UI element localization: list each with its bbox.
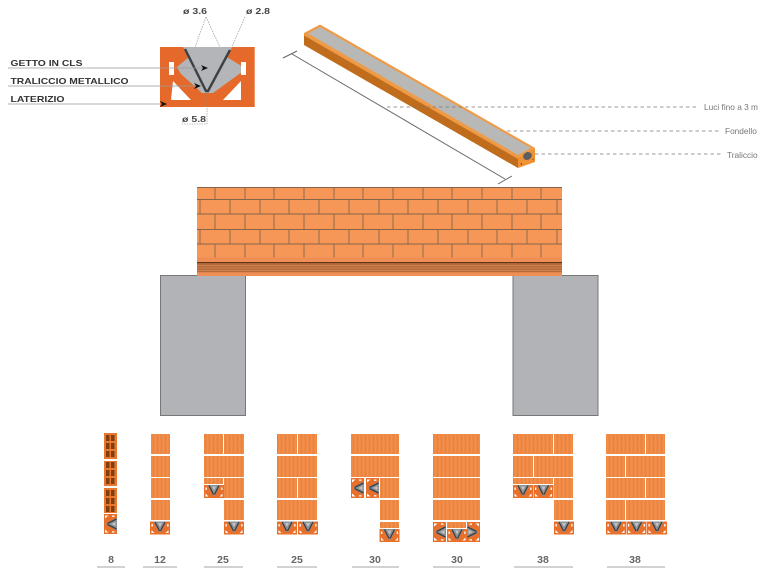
section holes <box>169 62 246 100</box>
label: getto in cls: GETTO IN CLS <box>10 58 83 68</box>
callout: fondello: Fondello <box>725 126 757 136</box>
beam top face <box>304 24 535 157</box>
diameter 2.8 label: ø 2.8 <box>246 6 270 16</box>
wall bricks <box>197 187 562 258</box>
bricks <box>513 434 573 520</box>
section body: laterizio <box>160 47 255 107</box>
configuration 25 B <box>277 434 318 567</box>
width 30: 30 <box>451 554 463 566</box>
section detail of the lintel <box>8 6 270 124</box>
configuration 38 B <box>606 434 667 567</box>
configuration 30 A <box>351 434 400 567</box>
callout: luci fino a 3 m: Luci fino a 3 m <box>704 102 758 112</box>
beam end face <box>518 148 535 168</box>
3D beam <box>283 24 758 184</box>
bricks <box>277 434 317 520</box>
label: traliccio metallico: TRALICCIO METALLICO <box>10 76 129 86</box>
diameter 3.6 label: ø 3.6 <box>183 6 207 16</box>
configuration 25 A <box>204 434 244 567</box>
bricks <box>433 434 480 528</box>
configuration 30 B <box>433 434 480 567</box>
beam side face <box>304 33 518 168</box>
callout: traliccio: Traliccio <box>727 150 758 160</box>
leader line: luci <box>387 107 722 154</box>
bricks <box>606 434 665 520</box>
beam length dimension <box>283 51 512 184</box>
hollow bricks <box>104 433 117 459</box>
left pillar <box>160 276 246 416</box>
section concrete fill <box>177 47 243 93</box>
width 25: 25 <box>217 554 229 566</box>
configuration 12 <box>143 434 177 567</box>
lintel bands <box>197 258 562 276</box>
bricks <box>351 434 399 528</box>
leader arrowheads <box>160 65 208 107</box>
bricks <box>151 434 170 520</box>
bricks <box>204 434 244 520</box>
width 38: 38 <box>629 554 641 566</box>
label: laterizio: LATERIZIO <box>10 94 65 104</box>
section metal truss <box>185 49 230 91</box>
diameter 5.8 label: ø 5.8 <box>182 114 206 124</box>
configuration 38 A <box>513 434 574 567</box>
brick wall with lintel <box>197 187 562 276</box>
width 12: 12 <box>154 554 166 566</box>
width 25: 25 <box>291 554 303 566</box>
width 38: 38 <box>537 554 549 566</box>
right pillar <box>513 276 598 416</box>
width 8: 8 <box>108 554 114 566</box>
configuration 8 <box>97 433 125 567</box>
concrete supports <box>160 276 598 416</box>
width 30: 30 <box>369 554 381 566</box>
